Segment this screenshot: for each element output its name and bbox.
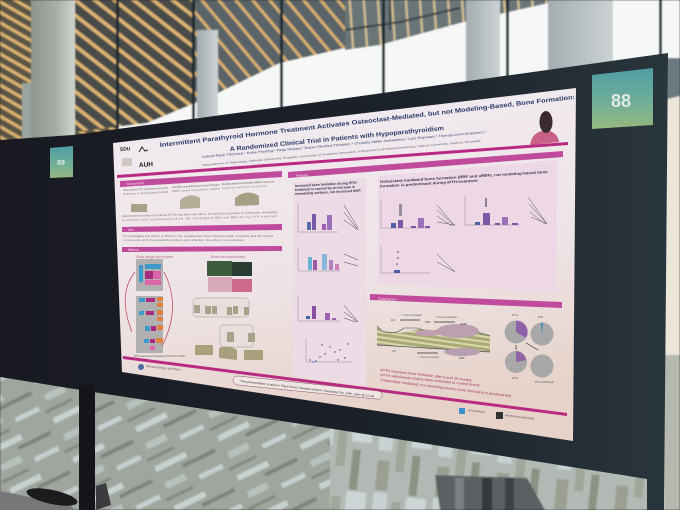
left heading: [295, 181, 361, 196]
section bar: Background: [120, 171, 282, 187]
pie arrows: [516, 343, 538, 350]
background text and bone diagrams: [122, 180, 278, 222]
ceiling: wooden slats right: [195, 0, 345, 103]
column text: Intermittent PTH treatment and bone: [123, 187, 169, 192]
histomorphometry heading: Bone histomorphometry: [211, 255, 245, 259]
pillar: right: [548, 0, 613, 70]
results panel: left column: [293, 178, 366, 386]
poster: [113, 88, 576, 441]
chart row 3: [298, 296, 358, 322]
chart: RBF lines: [437, 205, 455, 226]
contact: QR code: [496, 412, 535, 421]
ceiling: wooden slats left: [0, 0, 117, 145]
footer pill: [233, 376, 382, 399]
authors: Lisbeth Rach Thomsen,¹ Kaine Prusting,² Tanja Shojaei,³ Jesper Skovhus Thomsen,⁴ Christina Møller Andreassen,¹ Lars Rejnmark,⁵ Thomas Levin Andersen¹,⁶: [202, 130, 487, 159]
right edge: floor: [664, 355, 680, 510]
left heading: Increased bone formation during iPTH: [295, 181, 357, 188]
section bar: Aim: [122, 224, 282, 232]
curved red arrows: [125, 272, 135, 332]
rear pillar left: [22, 83, 33, 140]
bullet 2: •iPTH withdrawal returns bone formation to control levels: [380, 373, 480, 387]
sample icons: [194, 305, 255, 342]
summary text: [122, 210, 278, 222]
conclusion pie charts: [504, 313, 554, 384]
aim heading: Aim: [128, 228, 134, 232]
chart: uRBF lines: [528, 197, 547, 224]
column text: (RBF) occurs in resorption cavities: [172, 187, 221, 193]
column text: surfaces without resorption: [222, 185, 268, 190]
institution text: Rheumatology and Bone: [146, 364, 181, 372]
diagram labels: RBF: [425, 320, 431, 324]
bullet 3: •Osteoclast-mediated, not modeling-based, bone formation is predominant: [380, 378, 511, 398]
number card 88: [592, 68, 653, 129]
aim text: To investigate the effect of iPTH on the predominant bone formation after 6 months and 30 months: [123, 234, 274, 238]
chart: RBF: [381, 200, 430, 228]
pie placebo 6 months: [530, 322, 554, 346]
window frames: [116, 0, 662, 130]
diagram labels: QS: [392, 349, 396, 353]
pie labels: [512, 313, 554, 384]
bone lower line: [377, 345, 490, 352]
pillar: small: [197, 30, 218, 118]
design caption: iPTH treatment and biopsies at 6 and 30 months: [134, 355, 186, 358]
logos: [120, 146, 153, 169]
affiliations: ¹Department of Pathology, Odense University Hospital, University of Southern Denmark; ²Department of Clinical Medicine, Aarhus University, Aarhus, Denmark: [202, 139, 482, 167]
pie labels: iPTH: [512, 376, 518, 380]
logo Odense hospital: [122, 158, 132, 166]
column text: formation in hypoparathyroidism: [123, 191, 168, 196]
method heading: Method: [128, 248, 139, 252]
chart: uRBF: [465, 196, 520, 225]
aim text: [123, 234, 274, 242]
summary text: in patients with hypoparathyroidism. We investigated RBF and MBF during iPTH treatment: [122, 214, 277, 222]
presenter hair: [540, 111, 552, 133]
pie iPTH 30 months: [505, 351, 527, 373]
card text small: 89: [57, 160, 65, 167]
results panel: right column: [378, 160, 557, 292]
summary text: Intermittent parathyroid hormone (iPTH) has been reported to increase the proportion of osteoclastic remodeling: [122, 210, 278, 218]
diagram labels: [391, 313, 467, 360]
pie labels: iPTH withdrawal: [535, 380, 554, 384]
title rule: [117, 142, 568, 178]
bullet 1: •iPTH increases bone formation after 6 and 30 months: [380, 368, 472, 382]
dark carpet patch: [435, 475, 545, 510]
floor: carpet right: [330, 420, 650, 510]
pie labels: PLB: [538, 315, 543, 319]
pie labels: iPTH: [512, 313, 518, 317]
section bar: Method: [122, 246, 282, 252]
presenter photo: [530, 111, 559, 145]
diagram labels: ↑↑ bone formation: [417, 355, 440, 359]
bag on the floor: [0, 483, 111, 510]
presenter body: [530, 131, 559, 145]
conclusion bullets: [380, 368, 511, 398]
logo SDU: SDU: [120, 146, 131, 153]
bone diagrams: [131, 204, 147, 212]
bone top line: [377, 326, 490, 336]
pillar: far left: [31, 0, 75, 138]
column text: Lamellar remodeling-based bone formation: [172, 183, 221, 189]
diagram labels: uRBF: [460, 322, 467, 326]
pie iPTH 6 months: [504, 320, 528, 344]
title line 1: Intermittent Parathyroid Hormone Treatment Activates Osteoclast-Mediated, but not Modeling-Based, Bone Formation:: [159, 94, 575, 149]
flow boxes: [193, 298, 249, 317]
diagram labels: MBF: [459, 356, 465, 360]
title block: [159, 94, 575, 153]
pillar: centre right: [466, 0, 500, 82]
right heading: formation is predominant during iPTH-treatment: [380, 179, 479, 188]
study design flowchart: [125, 255, 186, 358]
logo arc: [139, 147, 148, 152]
chart: MBF lines: [437, 254, 455, 272]
chart: MBF: [381, 246, 430, 273]
ceiling beam: [345, 0, 460, 30]
right heading: [380, 170, 548, 188]
aim text: in patients with hypoparathyroidism and whether the effect is sustained: [123, 238, 243, 242]
poster sheet: [113, 88, 576, 441]
column text: Modeling-based bone formation (MBF) on quiescent: [222, 180, 274, 186]
title line 2: A Randomized Clinical Trial in Patients with Hypoparathyroidism: [230, 125, 445, 153]
pie withdrawal: [530, 354, 554, 378]
left heading: treatment is caused by an increase in: [295, 185, 355, 192]
pink formation blobs: [437, 324, 479, 338]
number card 89: [50, 146, 73, 178]
section bar: Results: [288, 151, 563, 178]
background heading: Background: [127, 181, 144, 186]
diagram labels: ES: [391, 318, 395, 322]
right heading: Osteoclast-mediated bone formation (RBF and uRBF), not modeling-based bone: [380, 170, 548, 184]
end diagrams: [195, 345, 213, 355]
scatter plot: [306, 338, 352, 363]
diagram labels: ↑↑ bone formation: [400, 313, 423, 317]
footer text: This presentation is also in Rare Bone Disease session Saturday Oct. 14th, 4pm @ 10.30: [240, 379, 375, 398]
results heading: Results: [296, 173, 308, 178]
chart row 2: [298, 248, 358, 271]
diagram labels: ↑↑ bone formation: [435, 315, 458, 319]
conclusion bone diagram: [377, 313, 490, 360]
conclusion heading: Conclusion: [378, 297, 397, 302]
section bar: Conclusion: [370, 294, 562, 308]
bone histomorphometry: [193, 255, 263, 360]
board legs: [79, 385, 95, 510]
study design heading: Study design and biopsies: [136, 255, 174, 259]
contact email: lisbeth.thomsen@rsyd.dk: [505, 413, 535, 421]
column text: [123, 180, 274, 196]
floor: carpet left: [0, 372, 330, 510]
chart row 1: [298, 204, 358, 232]
left heading: remodeling surfaces, not increased MAR: [295, 189, 361, 196]
micrographs: [207, 261, 232, 276]
bottom rule: [123, 356, 567, 416]
ceiling: wooden slats middle: [75, 0, 195, 132]
right edge: distant windows: [667, 58, 680, 100]
flow arrows: [400, 320, 455, 353]
ceiling: distant slats: [345, 0, 560, 50]
card text: 88: [611, 91, 631, 111]
logo AUH: AUH: [139, 161, 153, 169]
twitter handle: @LisbethRach: [468, 408, 486, 414]
institution logo: [138, 364, 181, 372]
social: twitter icon: [459, 408, 486, 414]
